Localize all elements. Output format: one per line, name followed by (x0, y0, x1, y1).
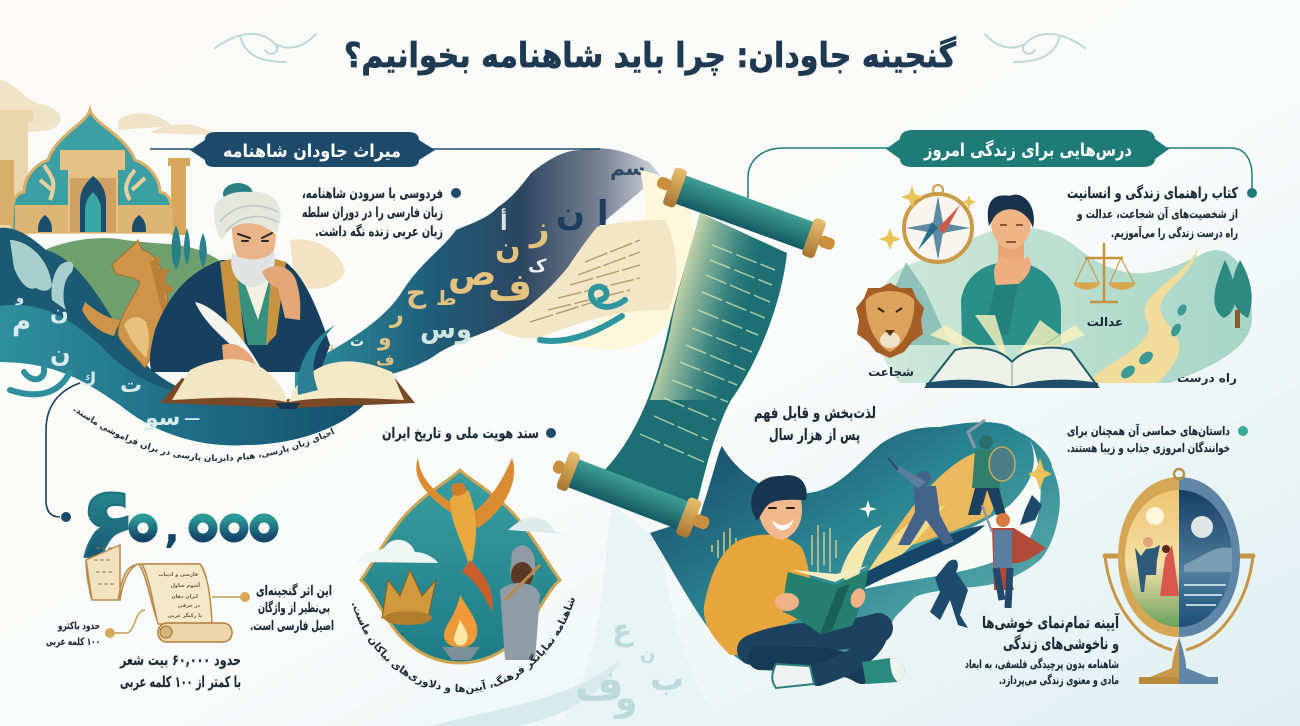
wave letters: م (12, 307, 31, 337)
golden sky (880, 450, 998, 555)
ground streak (860, 525, 985, 590)
title ornaments (215, 34, 1085, 62)
gold and pale letters: ف (488, 265, 532, 309)
gold and pale letters: ت (350, 334, 364, 350)
sand cloud behind (290, 239, 345, 289)
scroll sheet (86, 545, 210, 622)
illustration: pale swoosh and calligraphy (430, 505, 720, 726)
calligraphy: ف (575, 661, 624, 710)
gold sash (220, 258, 286, 345)
connector line (150, 148, 600, 150)
roll (158, 623, 232, 642)
header text: درس‌هایی برای زندگی امروز (923, 139, 1132, 161)
gold and pale letters: د (328, 339, 334, 353)
gold and pale letters: و (377, 326, 392, 351)
couple (1135, 545, 1160, 592)
warrior 2 with shield (968, 420, 1015, 515)
parchment lines (530, 240, 640, 322)
illustration: reader (704, 475, 905, 688)
shoes (772, 664, 814, 688)
scroll text: فارسی و ادبیات (158, 572, 198, 578)
calligraphy: ب (650, 659, 684, 699)
gold and pale letters (328, 156, 645, 369)
wave swirl (10, 368, 70, 394)
text: small note: ۱۰۰ کلمه عربی (46, 637, 100, 648)
text: small note: حدود باکثرو (57, 621, 100, 632)
warrior 1 (888, 458, 954, 545)
scale of justice (1073, 243, 1136, 302)
text: national identity heading: سند هویت ملی و تاریخ ایران (382, 426, 539, 442)
thinking hand (262, 266, 300, 320)
text: Ferdowsi bullet (302, 186, 461, 240)
reflection (1184, 585, 1226, 605)
moon (1191, 516, 1213, 538)
digits: , (164, 503, 180, 552)
gold and pale letters: ح (406, 276, 427, 309)
golden dragon (82, 240, 174, 368)
gold and pale letters: ز (528, 209, 550, 249)
paragraph: فردوسی با سرودن شاهنامه، (302, 186, 443, 202)
illustration: bottom scroll roller (546, 447, 716, 544)
gold and pale letters: وس (420, 315, 472, 345)
text: enjoyable heading: پس از هزار سال (769, 426, 860, 445)
wave letters: ن (50, 301, 69, 326)
bullet (451, 188, 461, 198)
day half (1125, 490, 1179, 627)
text: Ferdowsi bullet: زبان عربی زنده نگه داشت. (315, 223, 443, 240)
banner sheet (600, 213, 787, 512)
gold and pale letters: ن (495, 231, 521, 266)
curved text: revival of language: احیای زبان پارسی، هیام دابزبان پارسی در بران فراموشی ماسند. (74, 409, 334, 463)
illustration: lessons scene (856, 185, 1252, 388)
text: small note (46, 621, 100, 648)
digits: ۰ (230, 524, 236, 535)
title text: گنجینه جاودان: چرا باید شاهنامه بخوانیم؟ (344, 36, 956, 76)
scroll text (158, 572, 202, 619)
scroll text lines left (94, 548, 114, 584)
open book (926, 348, 1098, 387)
scroll text: آشوم شاول (171, 581, 200, 589)
teal swirl (540, 287, 625, 341)
gold and pale letters: ا ن (556, 194, 609, 234)
phoenix (416, 458, 514, 612)
curved text: medallion caption: شاهنامه نمایانگر فرهنگ، آیین‌ها و دلاوری‌های نیاکان ماست. (352, 598, 575, 694)
calligraphy (575, 613, 684, 719)
feather (195, 302, 262, 370)
sound bars (712, 525, 836, 575)
white inner swirl (860, 440, 1041, 590)
digits: ۰ (139, 524, 145, 535)
wave letters: و (15, 291, 24, 306)
rays of light (930, 315, 1085, 365)
hands (775, 593, 799, 611)
header text: میراث جاودان شاهنامه (223, 141, 401, 162)
towers (0, 110, 33, 240)
stand and base (1150, 637, 1208, 677)
compass (904, 185, 972, 262)
header plate (886, 130, 1169, 167)
mountains (890, 262, 950, 345)
wave letters: ت (120, 373, 142, 398)
text: treasure of original words: اصیل فارسی است. (250, 619, 334, 634)
gold and pale letters: أ (500, 207, 508, 236)
text: guide to life: کتاب راهنمای زندگی و انسانیت (1067, 184, 1238, 202)
top roller (651, 162, 841, 264)
swirl from book (298, 325, 335, 395)
lion (856, 283, 924, 358)
gold and pale letters: ط (436, 286, 457, 310)
text: mirror heading: و ناخوشی‌های زندگی (1003, 634, 1119, 653)
winding path (1086, 247, 1198, 383)
digit rings (133, 518, 274, 538)
banner text lines (640, 245, 775, 462)
section header: life lessons (748, 130, 1257, 198)
palace dome (12, 110, 172, 232)
label: courage: شجاعت (868, 365, 914, 379)
sparkles (879, 186, 976, 250)
text: enjoyable heading (754, 404, 876, 445)
wave letters: ك (80, 369, 96, 390)
palace facade (60, 150, 125, 232)
cloud shape (650, 422, 1060, 680)
glow (560, 170, 693, 350)
text: 60000 couplets: حدود ۶۰,۰۰۰ بیت شعر (119, 651, 241, 669)
wave letters: ن (50, 340, 70, 368)
landscape blob (875, 227, 1252, 383)
gold and pale letters: سم (610, 156, 645, 180)
calligraphy: و (613, 678, 637, 719)
night half (1179, 490, 1232, 627)
scroll text: با رکبگر عربی (167, 612, 202, 619)
parchment (494, 220, 677, 339)
illustration: open scroll banner (600, 162, 841, 512)
text: epic stories bullet (1067, 423, 1248, 456)
footprints (1119, 303, 1188, 381)
wave letters (12, 291, 200, 431)
connector: wave to number (46, 383, 80, 522)
gold and pale letters: ص (448, 253, 496, 294)
clouds (356, 540, 438, 563)
digits: ۰ (260, 524, 266, 535)
text: guide to life: از شخصیت‌های آن شجاعت، عدالت و (1076, 206, 1238, 222)
gold and pale letters: ف (376, 350, 395, 369)
warrior (500, 545, 540, 660)
text: mirror heading (965, 612, 1119, 688)
scroll text: ایران دهان (171, 594, 198, 600)
illustration: phoenix medallion (356, 458, 564, 663)
scroll text: در حرفی (178, 603, 200, 609)
label: right path: راه درست (1177, 371, 1237, 385)
text: enjoyable heading: لذت‌بخش و قابل فهم (754, 404, 876, 422)
head (757, 487, 802, 540)
griffin silhouette (10, 240, 73, 310)
label: justice: عدالت (1087, 315, 1123, 329)
text: 60000 couplets (119, 651, 241, 691)
medallion (361, 470, 560, 663)
connector line (748, 148, 1252, 198)
face (232, 219, 276, 274)
trees (1214, 260, 1252, 318)
swoosh (560, 505, 720, 726)
text: mirror heading: مادی و معنوی زندگی می‌پردازد. (999, 673, 1119, 688)
beard (231, 250, 275, 287)
section header: heritage (150, 132, 600, 167)
silhouette warriors (930, 495, 1042, 628)
frame (1118, 477, 1179, 637)
gold and pale letters: ک (528, 256, 547, 277)
calligraphy: ع (612, 613, 634, 648)
cypress trees (172, 225, 207, 270)
illustration: Ferdowsi (150, 183, 415, 409)
book (160, 377, 415, 408)
banner glow (650, 213, 787, 400)
text: 60000 couplets: با کمتر از ۱۰۰ کلمه عربی (120, 673, 241, 691)
text: guide to life (1067, 184, 1238, 241)
text: epic stories bullet: خوانندگان امروزی جذاب و زیبا هستند. (1067, 441, 1230, 456)
sweater (704, 535, 811, 655)
book (783, 570, 868, 634)
header plate (190, 132, 435, 167)
big number: 60,000 (76, 464, 274, 581)
turban (214, 192, 281, 240)
wave letters: ـــ (184, 408, 200, 424)
text: treasure of original words: این اثر گنجینه‌ای (256, 583, 332, 599)
teal cap (223, 183, 253, 205)
green hill (35, 238, 240, 330)
illustration: story cloud with warriors (650, 420, 1060, 680)
illustration: big flowing wave (0, 228, 365, 445)
robe (150, 260, 330, 372)
connectors (212, 596, 245, 598)
text: Ferdowsi bullet: زبان فارسی را در دوران سلطه (302, 205, 443, 221)
stream shape (295, 148, 660, 395)
inner robe (232, 265, 282, 345)
sun (1146, 507, 1164, 525)
calligraphy: ن (640, 644, 655, 665)
dark wave body (0, 228, 365, 445)
text: treasure of original words: بی‌نظیر از واژگان (258, 600, 330, 616)
wave letters: سو (144, 406, 180, 431)
light wave band (0, 305, 365, 445)
text: epic stories bullet: داستان‌های حماسی آن همچنان برای (1067, 423, 1230, 438)
illustration: stream of letters (295, 148, 660, 395)
digits: ۰ (199, 524, 205, 535)
illustration: small parchment scroll (86, 545, 250, 642)
illustration: parchment and glow (494, 170, 693, 350)
illustration: palace and landscape (0, 80, 240, 330)
text: mirror heading: شاهنامه بدون پرچیدگی فلسفی، به ابعاد (965, 657, 1119, 672)
brows and eyes (238, 233, 272, 241)
gold and pale letters: ر (389, 300, 404, 328)
text: treasure of original words (250, 583, 334, 634)
trousers (752, 628, 878, 675)
text: mirror heading: آیینه تمام‌نمای خوشی‌ها (982, 612, 1119, 632)
illustration: mirror (1105, 469, 1253, 684)
warrior 3 caped (982, 505, 1046, 608)
page light (840, 525, 882, 590)
person (961, 195, 1061, 345)
sand clouds (0, 80, 215, 135)
digits: ۶ (76, 464, 137, 581)
writing hand (222, 344, 256, 372)
sparkle (1028, 458, 1052, 490)
title (215, 34, 1085, 76)
text: guide to life: راه درست زندگی را می‌آموزیم. (1111, 225, 1238, 241)
flame (444, 595, 477, 648)
crown (382, 570, 436, 618)
